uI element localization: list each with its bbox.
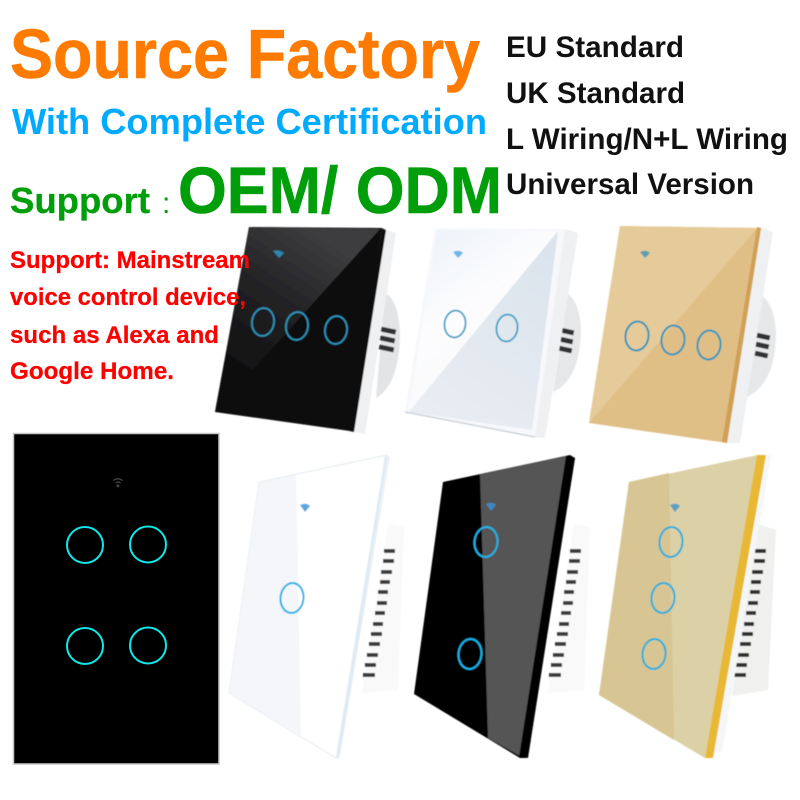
heading: OEM/ ODM: OEM/ ODM <box>178 153 502 227</box>
switch: black two-gang glass panel <box>414 455 590 758</box>
voice control note: Support: Mainstream <box>10 247 250 274</box>
voice control note: such as Alexa and <box>10 322 219 349</box>
standards list: UK Standard <box>506 77 685 110</box>
icon: wifi indicator <box>114 479 122 487</box>
standards list <box>506 31 788 201</box>
standards list: Universal Version <box>506 168 754 201</box>
switch: black three-gang EU panel <box>215 227 400 434</box>
switch: gold three-gang EU panel <box>589 226 776 443</box>
standards list: EU Standard <box>506 31 684 64</box>
title: Source Factory: Source Factory <box>10 15 480 93</box>
standards list: L Wiring/N+L Wiring <box>506 123 788 156</box>
switch: white one-gang glass panel <box>229 455 404 758</box>
switch: gold three-gang glass panel <box>599 455 776 758</box>
switch: white two-gang EU panel <box>405 228 581 438</box>
support label: : <box>162 187 170 220</box>
support label: Support <box>10 180 150 221</box>
voice control note <box>10 247 250 385</box>
subtitle: With Complete Certification: With Complete Certification <box>12 101 487 142</box>
switch: flat black four-gang US panel <box>14 434 219 764</box>
voice control note: Google Home. <box>10 358 174 385</box>
voice control note: voice control device, <box>10 284 246 311</box>
